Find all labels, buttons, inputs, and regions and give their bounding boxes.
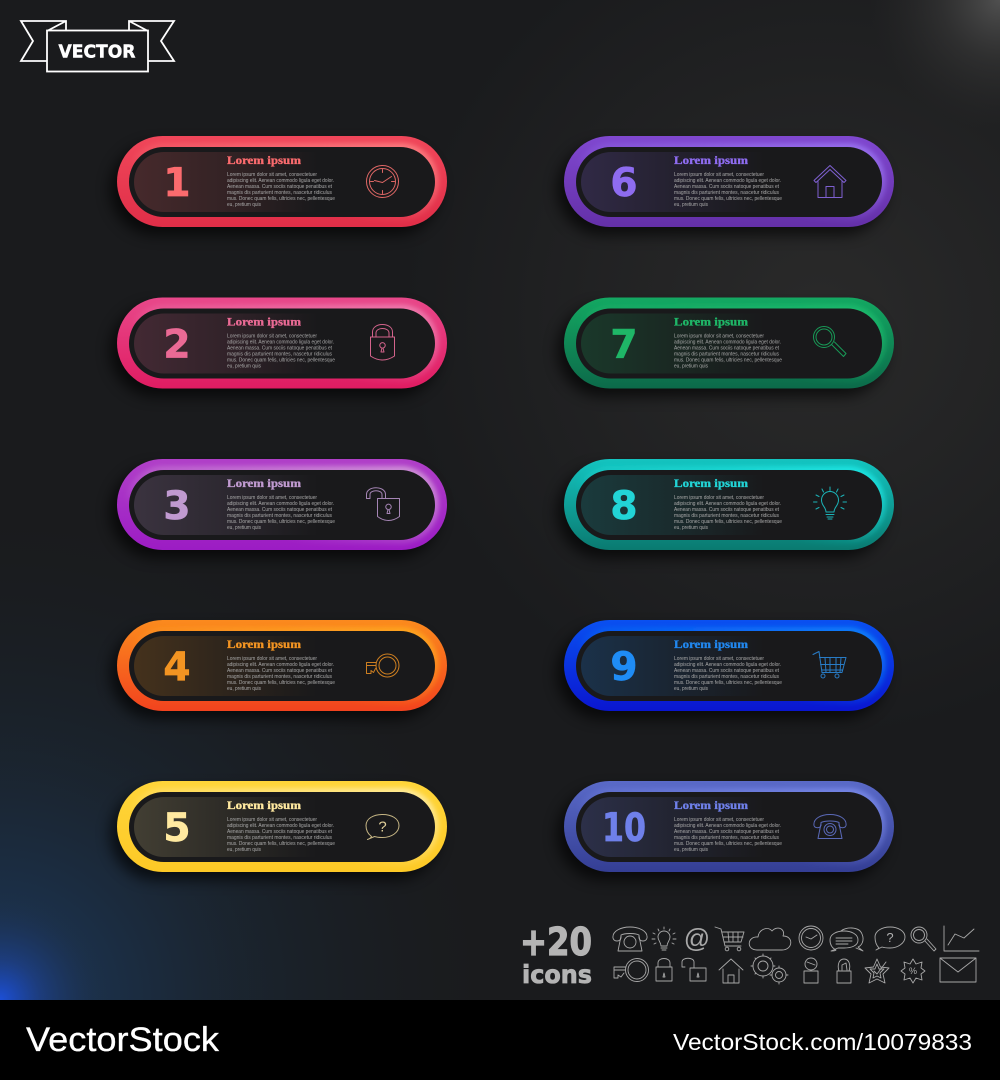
panel 4: key: magnis dis parturient montes, nascetur ridiculus bbox=[227, 674, 332, 680]
panel 9: shopping cart: 9 bbox=[610, 645, 638, 690]
panel 9: shopping cart: Aenean massa. Cum sociis natoque penatibus et bbox=[674, 668, 780, 674]
icon: at sign: @ bbox=[684, 923, 710, 953]
icon strip bbox=[613, 923, 979, 984]
panel 5: question bubble: 5 bbox=[163, 806, 191, 851]
panel 2: lock: eu, pretium quis bbox=[227, 364, 261, 370]
panel 7: magnifier: magnis dis parturient montes, nascetur ridiculus bbox=[674, 352, 779, 358]
panel 2: lock: adipiscing elit. Aenean commodo ligula eget dolor. bbox=[227, 340, 334, 346]
panel 1: clock: mus. Donec quam felis, ultricies nec, pellentesque bbox=[227, 196, 335, 202]
watermark bar: VectorStock bbox=[26, 1021, 220, 1059]
icon: man bbox=[804, 958, 818, 983]
panel 8: light bulb: eu, pretium quis bbox=[674, 525, 708, 531]
panel 9: shopping cart: Lorem ipsum dolor sit amet, consectetuer bbox=[674, 656, 764, 662]
icon: speech bubbles bbox=[830, 928, 863, 951]
icon: cart bbox=[715, 927, 744, 951]
icon: question bubble bbox=[875, 927, 905, 950]
panel 1: clock: Lorem ipsum bbox=[227, 153, 301, 167]
panel 5: question bubble: Aenean massa. Cum sociis natoque penatibus et bbox=[227, 829, 333, 835]
panel 2: lock: Aenean massa. Cum sociis natoque penatibus et bbox=[227, 346, 333, 352]
panel 8: light bulb: mus. Donec quam felis, ultricies nec, pellentesque bbox=[674, 519, 782, 525]
panel 3: open lock: adipiscing elit. Aenean commodo ligula eget dolor. bbox=[227, 501, 334, 507]
panel 10: telephone: Aenean massa. Cum sociis natoque penatibus et bbox=[674, 829, 780, 835]
panel 7: magnifier: Lorem ipsum bbox=[674, 314, 748, 328]
panel 7: magnifier: adipiscing elit. Aenean commodo ligula eget dolor. bbox=[674, 340, 781, 346]
icon: open lock bbox=[682, 958, 706, 981]
panel 6: house: adipiscing elit. Aenean commodo ligula eget dolor. bbox=[674, 178, 781, 184]
panel 8: light bulb: Lorem ipsum bbox=[674, 476, 748, 490]
panel 5: question bubble: mus. Donec quam felis, ultricies nec, pellentesque bbox=[227, 841, 335, 847]
icon: telephone bbox=[613, 927, 647, 951]
watermark bar: VectorStock.com/10079833 bbox=[673, 1029, 972, 1055]
panel 3: open lock: Lorem ipsum bbox=[227, 476, 301, 490]
panel 7: magnifier: eu, pretium quis bbox=[674, 364, 708, 370]
icon strip caption: icons bbox=[522, 960, 592, 989]
panel 1: clock bbox=[110, 136, 447, 235]
panel 7: magnifier: Aenean massa. Cum sociis natoque penatibus et bbox=[674, 346, 780, 352]
panel 10: telephone: Lorem ipsum dolor sit amet, consectetuer bbox=[674, 817, 764, 823]
icon: question bubble: ? bbox=[886, 930, 894, 945]
panel 10: telephone: magnis dis parturient montes, nascetur ridiculus bbox=[674, 835, 779, 841]
panel 4: key: Lorem ipsum dolor sit amet, consectetuer bbox=[227, 656, 317, 662]
panel 5: question bubble: Lorem ipsum bbox=[227, 798, 301, 812]
panel 1: clock: 1 bbox=[163, 161, 191, 206]
icon: clock bbox=[799, 926, 823, 950]
panel 6: house: Lorem ipsum dolor sit amet, consectetuer bbox=[674, 172, 764, 178]
icon: lock bbox=[656, 958, 672, 981]
panel 5: question bubble: Lorem ipsum dolor sit amet, consectetuer bbox=[227, 817, 317, 823]
panel 6: house bbox=[557, 136, 894, 235]
panel 2: lock: 2 bbox=[163, 322, 191, 368]
panel 8: light bulb: 8 bbox=[610, 484, 638, 529]
panel 10: telephone: mus. Donec quam felis, ultricies nec, pellentesque bbox=[674, 841, 782, 847]
icon: key bbox=[614, 958, 648, 982]
panel 10: telephone: adipiscing elit. Aenean commodo ligula eget dolor. bbox=[674, 823, 781, 829]
panel 8: light bulb: magnis dis parturient montes, nascetur ridiculus bbox=[674, 513, 779, 519]
panel 8: light bulb: Aenean massa. Cum sociis natoque penatibus et bbox=[674, 507, 780, 513]
panel 7: magnifier: 7 bbox=[610, 322, 638, 368]
watermark bar bbox=[0, 1000, 1000, 1080]
panel 3: open lock: magnis dis parturient montes, nascetur ridiculus bbox=[227, 513, 332, 519]
panel 9: shopping cart: Lorem ipsum bbox=[674, 637, 748, 651]
icon strip caption bbox=[520, 920, 592, 989]
icon: cloud bbox=[749, 928, 791, 950]
panel 3: open lock: 3 bbox=[163, 484, 191, 529]
icon: line chart bbox=[944, 926, 979, 951]
vector ribbon badge bbox=[21, 21, 174, 72]
panel 7: magnifier: Lorem ipsum dolor sit amet, consectetuer bbox=[674, 334, 764, 340]
panel 9: shopping cart: mus. Donec quam felis, ultricies nec, pellentesque bbox=[674, 680, 782, 686]
panel 8: light bulb: adipiscing elit. Aenean commodo ligula eget dolor. bbox=[674, 501, 781, 507]
panel 5: question bubble: adipiscing elit. Aenean commodo ligula eget dolor. bbox=[227, 823, 334, 829]
panel 2: lock: mus. Donec quam felis, ultricies nec, pellentesque bbox=[227, 358, 335, 364]
panel 4: key: adipiscing elit. Aenean commodo ligula eget dolor. bbox=[227, 662, 334, 668]
panel 5: question bubble: magnis dis parturient montes, nascetur ridiculus bbox=[227, 835, 332, 841]
panel 10: telephone: 10 bbox=[602, 806, 646, 851]
panel 4: key: Lorem ipsum bbox=[227, 637, 301, 651]
panel 4: key bbox=[110, 620, 447, 719]
panel 3: open lock: eu, pretium quis bbox=[227, 525, 261, 531]
panel 3: open lock: Aenean massa. Cum sociis natoque penatibus et bbox=[227, 507, 333, 513]
panel 1: clock: adipiscing elit. Aenean commodo ligula eget dolor. bbox=[227, 178, 334, 184]
panel 2: lock: Lorem ipsum bbox=[227, 314, 301, 328]
panel 7: magnifier bbox=[557, 298, 894, 396]
icon: gears bbox=[751, 954, 788, 984]
panel 1: clock: eu, pretium quis bbox=[227, 202, 261, 208]
panel 4: key: eu, pretium quis bbox=[227, 686, 261, 692]
panel 2: lock: Lorem ipsum dolor sit amet, consectetuer bbox=[227, 334, 317, 340]
panel 1: clock: Aenean massa. Cum sociis natoque penatibus et bbox=[227, 184, 333, 190]
panel 4: key: Aenean massa. Cum sociis natoque penatibus et bbox=[227, 668, 333, 674]
panel 6: house: magnis dis parturient montes, nascetur ridiculus bbox=[674, 190, 779, 196]
icon: magnifier bbox=[911, 927, 936, 951]
panel 9: shopping cart: magnis dis parturient montes, nascetur ridiculus bbox=[674, 674, 779, 680]
panel 6: house: Lorem ipsum bbox=[674, 153, 748, 167]
panel 8: light bulb: Lorem ipsum dolor sit amet, consectetuer bbox=[674, 495, 764, 501]
panel 6: house: 6 bbox=[610, 161, 638, 206]
icon: envelope bbox=[940, 958, 976, 982]
panel 9: shopping cart: adipiscing elit. Aenean commodo ligula eget dolor. bbox=[674, 662, 781, 668]
panel 9: shopping cart bbox=[557, 620, 894, 719]
panel 10: telephone: eu, pretium quis bbox=[674, 847, 708, 853]
icon: star bbox=[865, 959, 889, 983]
panel 1: clock: magnis dis parturient montes, nascetur ridiculus bbox=[227, 190, 332, 196]
panel 2: lock: magnis dis parturient montes, nascetur ridiculus bbox=[227, 352, 332, 358]
icon: house bbox=[719, 959, 743, 983]
panel 6: house: Aenean massa. Cum sociis natoque penatibus et bbox=[674, 184, 780, 190]
icon: bulb bbox=[652, 927, 676, 950]
panel 5: question bubble: eu, pretium quis bbox=[227, 847, 261, 853]
panel 4: key: mus. Donec quam felis, ultricies nec, pellentesque bbox=[227, 680, 335, 686]
panel 8: light bulb bbox=[557, 459, 894, 558]
panel 3: open lock: mus. Donec quam felis, ultricies nec, pellentesque bbox=[227, 519, 335, 525]
panel 2: lock bbox=[110, 298, 447, 396]
icon: percent badge bbox=[901, 959, 925, 983]
panel 6: house: mus. Donec quam felis, ultricies nec, pellentesque bbox=[674, 196, 782, 202]
panel 5: question bubble bbox=[110, 781, 447, 880]
panel 10: telephone: Lorem ipsum bbox=[674, 798, 748, 812]
panel 3: open lock bbox=[110, 459, 447, 558]
icon: percent badge: % bbox=[909, 966, 917, 976]
panel 6: house: eu, pretium quis bbox=[674, 202, 708, 208]
icon: woman bbox=[837, 959, 851, 983]
panel 4: key: 4 bbox=[163, 645, 191, 690]
vector ribbon badge: VECTOR bbox=[58, 42, 136, 62]
panel 1: clock: Lorem ipsum dolor sit amet, consectetuer bbox=[227, 172, 317, 178]
icon strip caption: +20 bbox=[520, 920, 592, 964]
panel 10: telephone bbox=[557, 781, 894, 880]
panel 9: shopping cart: eu, pretium quis bbox=[674, 686, 708, 692]
panel 7: magnifier: mus. Donec quam felis, ultricies nec, pellentesque bbox=[674, 358, 782, 364]
panel 3: open lock: Lorem ipsum dolor sit amet, consectetuer bbox=[227, 495, 317, 501]
panel 5: question bubble: ? bbox=[378, 818, 387, 836]
